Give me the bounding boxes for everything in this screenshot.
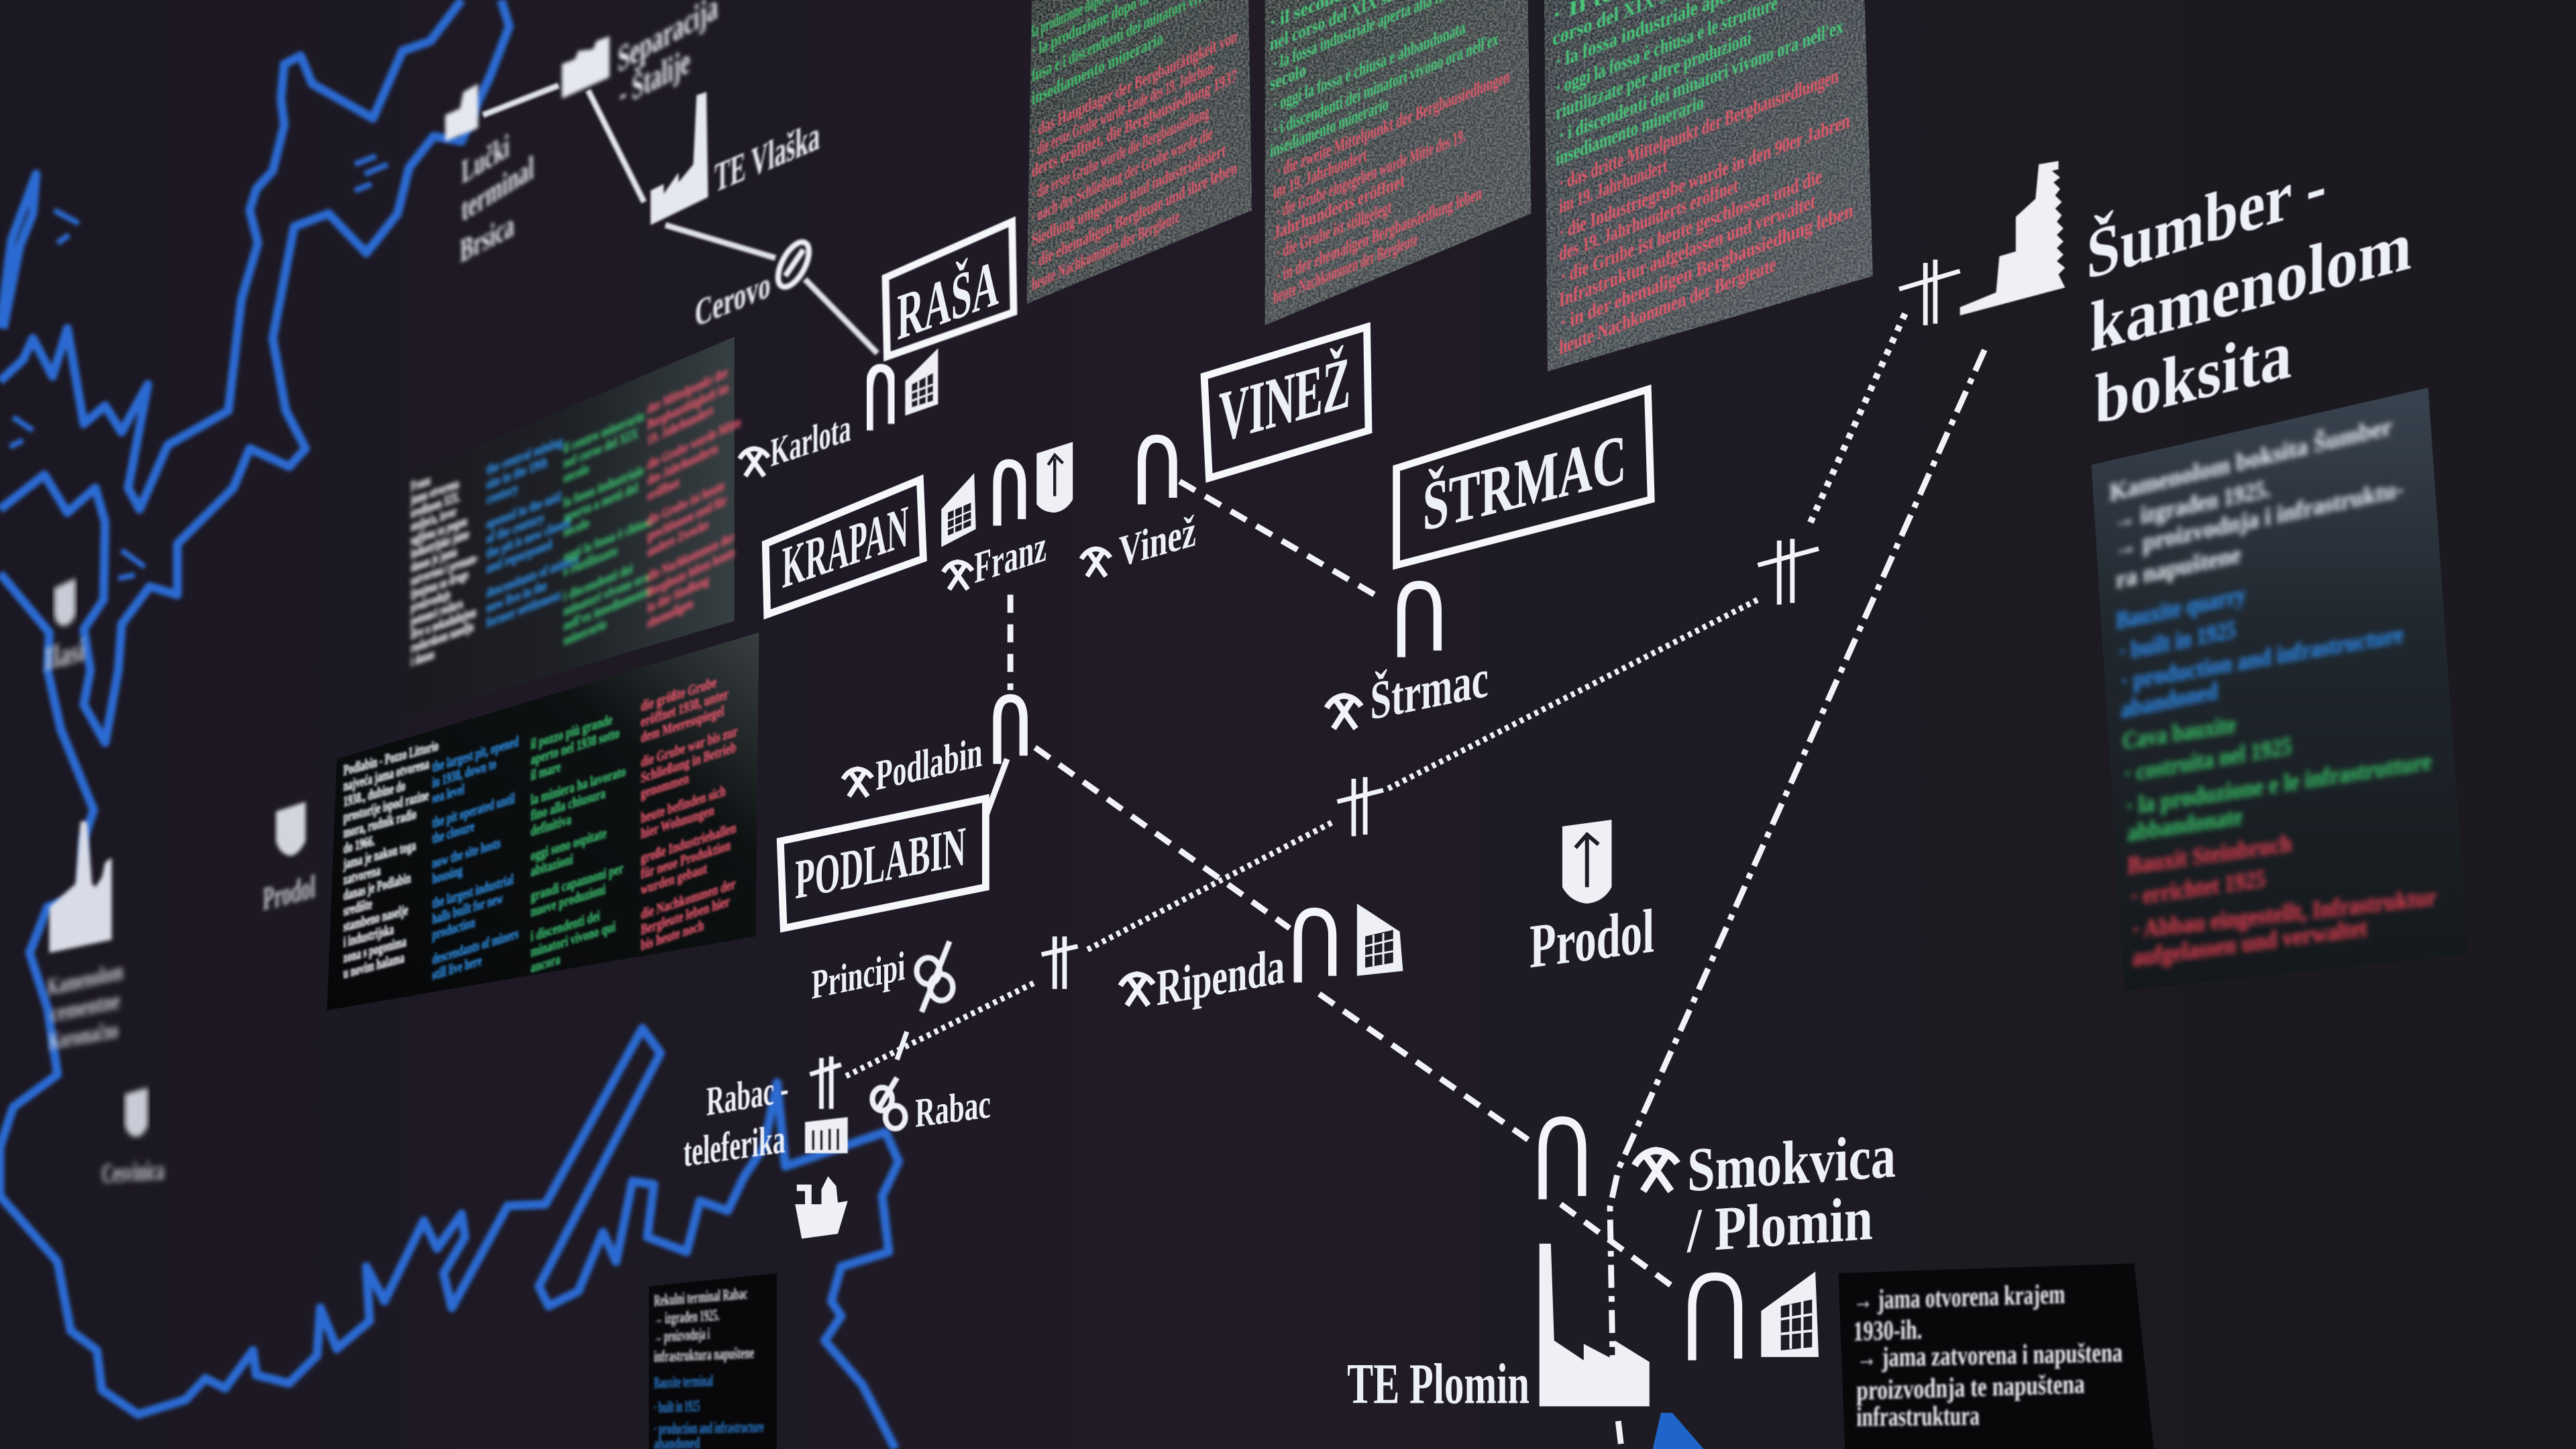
panel: top panel 2: insediamento minerario [1270, 93, 1388, 162]
icon: port Bršica [445, 84, 478, 142]
panel: Šumber quarry text: ra napuštene [2116, 541, 2241, 594]
panel: Šumber quarry text: Bauxite quarry [2116, 581, 2246, 635]
icon: hammers Vinež [1081, 549, 1110, 576]
panel: top panel 1: insediamento minerario [1032, 28, 1163, 109]
column: Croatian text: stoljeća, izvor [411, 503, 457, 535]
label: Prodol: Prodol [1529, 897, 1654, 981]
label: Ripenda: Ripenda [1157, 937, 1285, 1017]
icon: arch Smokvica [1543, 1120, 1582, 1199]
panel: Plomin pit text: infrastruktura [1856, 1401, 1980, 1433]
label: Prodol left, out of focus: Prodol [263, 868, 315, 918]
label: PODLABIN: PODLABIN [795, 815, 966, 911]
column: Croatian text: ijenjena za druge [411, 566, 469, 602]
label: Ilasi, out of focus: Ilasi [44, 631, 85, 678]
column: German text: in der Siedlung [647, 572, 709, 616]
column: Croatian text: jama otvorena [411, 475, 459, 508]
icon: Rabac terminal building [805, 1117, 848, 1153]
panel: top panel 2: Jahrhunderts eröffnet [1273, 170, 1405, 244]
column: Croatian text: zona s pogonima [343, 933, 407, 966]
icon: knot Principi [917, 941, 953, 1012]
column: English text: site in the 19th [486, 454, 547, 492]
column: English text: in 1938, down to [432, 755, 496, 792]
panel: Rabac terminal text: infrastruktura napuštene [654, 1344, 754, 1366]
icon: pylon near Šumber [1899, 260, 1960, 325]
column: German text: eröffnet [647, 474, 680, 504]
column: English text: the pit is now closed [486, 514, 570, 561]
column: Croatian text: industrijske jame [411, 525, 470, 562]
panel: Plomin pit text: proizvodnja te napuštena [1856, 1368, 2085, 1407]
column: Croatian text: danas je jama [411, 543, 458, 576]
label: Šumber - kamenolom boksita [2086, 145, 2412, 439]
column: German text: andere Zwecke [647, 516, 708, 560]
icon: arch Karlota [869, 368, 892, 431]
column: Italian text: e riutilizzata [564, 542, 618, 580]
column: German text: dem Meeresspiegel [641, 703, 724, 747]
icon: knot Cerovo [771, 237, 815, 292]
label: TE Vlaška: TE Vlaška [714, 111, 820, 201]
panel: top panel 1: · die ehemaligen Bergleute und ihre leben [1032, 158, 1237, 274]
column: English text: the largest pit, opened [432, 733, 519, 776]
label: Separacija - Štalije: - Štalije [619, 40, 690, 115]
column: Italian text: la miniera ha lavorato [531, 763, 626, 809]
panel: Šumber quarry text: · Abbau eingestellt, Infrastruktur [2133, 883, 2436, 943]
panel: lower-left multilingual table [327, 633, 759, 1010]
panel: Šumber quarry text: → izgrađen 1925. [2114, 475, 2270, 535]
column: German text: Bergleute leben hier [641, 894, 730, 938]
panel: Rabac terminal text [649, 1273, 777, 1449]
column: English text: descendants of miners [432, 925, 519, 968]
column: German text: eröffnet 1938, unter [641, 686, 729, 731]
column: Italian text: i discendenti dei [564, 560, 633, 605]
panel: top panel 2: im 19. Jahrhundert [1273, 144, 1367, 203]
icon: pylon centre [1337, 777, 1383, 837]
column: Croatian text: žive u nekadašnjem [411, 604, 476, 643]
icon: arch Štrmac [1401, 585, 1438, 657]
column: German text: Bergbautätigkeit im [647, 379, 729, 433]
label: VINEŽ: VINEŽ [1219, 341, 1350, 458]
route: dashed mine tunnels [985, 482, 1672, 1287]
label: Šumber - kamenolom boksita: Šumber - [2086, 145, 2326, 295]
column: German text: die Grube ist heute [647, 477, 724, 529]
column: German text: Bergleute leben heute [647, 544, 735, 600]
column: Italian text: i discendenti dei [531, 908, 600, 945]
column: German text: die Grube wurde Mitte [647, 414, 741, 473]
column: Croatian text: i danas [411, 645, 435, 669]
column: Italian text: oggi la fossa è chiusa [564, 513, 653, 566]
label: Podlabin: Podlabin [875, 728, 982, 800]
panel: top panel 3: · in der ehemaligen Bergbausiedlung leben [1561, 198, 1854, 335]
column: German text: geschlossen und für [647, 492, 727, 544]
column: English text: housing [432, 861, 463, 888]
column: English text: the central mining [486, 433, 564, 478]
column: Croatian text: do 1966. [343, 832, 375, 857]
column: Italian text: abitazioni [531, 851, 574, 880]
column: Italian text: ancora [531, 951, 560, 977]
icon: factory Separacija [562, 36, 610, 99]
icon: knot Rabac [872, 1078, 905, 1128]
label: Kamenolom cementne Koromačno, out of focus: Kamenolom [48, 958, 123, 1002]
panel: top panel 2: · die Grube ist stillgelegt [1277, 197, 1391, 264]
label: Kamenolom cementne Koromačno, out of focus: Koromačno [49, 1016, 118, 1056]
icon: hammers Franz [943, 562, 972, 590]
column: Croatian text: proizvodnje [411, 586, 451, 616]
label: Lučki terminal Brsica: terminal [462, 148, 534, 229]
panel: Plomin pit text: 1930-ih. [1853, 1314, 1922, 1347]
column: Croatian text: mora, rudnik radio [343, 806, 417, 841]
column: Croatian text: 1938., dubine do [343, 777, 405, 810]
column: Italian text: secolo [564, 515, 589, 541]
column: German text: große Industriehallen [641, 820, 737, 867]
label: Kamenolom cementne Koromačno, out of focus: cementne [51, 987, 120, 1028]
column: Croatian text: potomci rudara [411, 595, 464, 629]
panel: Šumber quarry text: aufgelassen und verwaltet [2133, 914, 2368, 971]
column: Croatian text: u novim halama [343, 949, 405, 981]
label: Rabac - teleferika: Rabac - [706, 1065, 789, 1125]
label: Rabac - teleferika: teleferika [684, 1116, 786, 1176]
column: Croatian text: danas je Podlabin [343, 869, 411, 904]
panel: top panel 3: · die Grube ist heute geschlossen und die [1561, 164, 1822, 288]
panel: Rabac terminal text: Rekulni terminal Rabac [654, 1285, 747, 1310]
icon: factory TE Vlaška [651, 92, 708, 225]
column: English text: production [432, 914, 476, 944]
icon: pylon Principi [1042, 936, 1078, 989]
label box: KRAPAN [765, 480, 923, 614]
column: English text: the closure [432, 818, 474, 847]
icon: shield Franz [1036, 442, 1073, 513]
column: English text: halls built for new [432, 890, 503, 928]
panel: top panel 1 [1027, 0, 1252, 304]
label: Cesvinica, out of focus: Cesvinica [102, 1155, 164, 1189]
route: dash-dot railway Šumber to Plomin [1610, 350, 1984, 1449]
label: Smokvica / Plomin [1686, 1122, 1896, 1266]
column: German text: des Jahrhunderts [647, 440, 718, 488]
label: Smokvica / Plomin: / Plomin [1686, 1184, 1873, 1266]
label box: PODLABIN [780, 798, 985, 928]
panel: top panel 2 [1265, 0, 1531, 325]
column: German text: genommen [641, 770, 689, 802]
icon: blue marker at bottom [1653, 1413, 1704, 1449]
column: Croatian text: Franz [411, 472, 431, 494]
panel: top panel 1: heute Nachkommen der Bergleute [1032, 206, 1179, 295]
panel: top panel 2: heute Nachkommen der Bergleute [1273, 229, 1417, 309]
label: Šumber - kamenolom boksita: kamenolom [2090, 206, 2412, 368]
label: Štrmac: Štrmac [1370, 647, 1489, 731]
column: German text: 19. Jahrhundert [647, 402, 714, 448]
label: Šumber - kamenolom boksita: boksita [2094, 315, 2292, 439]
panel: Plomin pit text: → jama otvorena krajem [1853, 1279, 2065, 1316]
icon: shield Prodol left, out of focus [276, 802, 306, 856]
column: Italian text: minatori vivono ora [564, 568, 649, 620]
column: German text: ehemaligen [647, 594, 693, 631]
icon: arch Franz [998, 464, 1022, 526]
icon: house Ripenda [1357, 904, 1403, 976]
column: Italian text: aperto nel 1938 sotto [531, 725, 620, 769]
panel: top panel 3: heute Nachkommen der Bergleute [1559, 252, 1776, 360]
label: Lučki terminal Brsica [460, 126, 534, 270]
column: English text: former settlement [486, 586, 561, 631]
label: TE Plomin: TE Plomin [1347, 1352, 1529, 1415]
panel: top panel 3: im 19. Jahrhundert [1559, 153, 1668, 218]
panel: Šumber quarry text: abandoned [2121, 678, 2218, 724]
panel: top panel 1: derts eröffnet, die Bergbausiedlung 1937 [1032, 66, 1237, 182]
panel: Plomin pit text [1838, 1263, 2154, 1449]
label: Smokvica / Plomin: Smokvica [1687, 1122, 1896, 1205]
icon: arch Vinež [1142, 439, 1173, 504]
column: English text: and repurposed [486, 536, 553, 576]
column: Italian text: il pozzo più grande [531, 712, 612, 753]
icon: factory TE Plomin [1540, 1244, 1650, 1406]
column: German text: wurden gebaut [641, 861, 707, 898]
column: English text: descendants of miners [486, 550, 578, 601]
icon: arch Ripenda [1298, 912, 1332, 982]
panel: top panel 3: des 19. Jahrhunderts eröffnet [1559, 173, 1738, 266]
column: English text: opened in the mid [486, 488, 561, 532]
panel: Rabac terminal text: Bauxite terminal [654, 1372, 713, 1392]
label: Lučki terminal Brsica: Brsica [460, 207, 515, 270]
panel: Šumber quarry text: Bauxit Steinbruch [2127, 829, 2292, 879]
label: Vinež: Vinež [1119, 506, 1196, 577]
column: German text: hier Wohnungen [641, 802, 714, 843]
column: Croatian text: zatvorena i prenam- [411, 549, 478, 589]
icon: pylon east [1758, 539, 1819, 604]
column: English text: the pit operated until [432, 790, 515, 832]
column: English text: now the site hosts [432, 835, 500, 872]
label: Rabac: Rabac [915, 1081, 991, 1136]
column: English text: the largest industrial [432, 871, 513, 912]
column: English text: now live in the [486, 578, 547, 616]
column: Croatian text: sredinom XIX. [411, 488, 460, 521]
column: Italian text: nel corso del XIX [564, 425, 639, 472]
icon: arch Plomin [1692, 1277, 1738, 1360]
label: Franz: Franz [974, 521, 1046, 593]
link knot icons [771, 237, 953, 1128]
panel: Šumber quarry text: · production and infrastructure [2121, 621, 2404, 696]
panel: Rabac terminal text: → proizvodnja i [654, 1325, 710, 1346]
label box: VINEŽ [1204, 327, 1368, 478]
icon: pylon Rabac [810, 1057, 841, 1109]
mine hammer icons [740, 449, 1677, 1191]
panel: top panel 3 [1544, 0, 1873, 371]
label: Rabac - teleferika [684, 1065, 789, 1176]
column: Croatian text: stambeno naselje [343, 902, 408, 934]
column: German text: bis heute noch [641, 917, 704, 954]
icon: arch Podlabin [998, 698, 1024, 764]
column: Croatian text: Podlabin - Pozzo Littorio [343, 737, 439, 779]
column: Italian text: nuove produzioni [531, 881, 606, 920]
panel: top panel 3: Infrastruktur aufgelassen und verwaltet [1559, 189, 1815, 312]
icon: hammers Ripenda [1120, 974, 1153, 1006]
panel: Šumber quarry text: · built in 1925 [2119, 616, 2236, 666]
panel: Šumber quarry text: → proizvodnja i infrastruktu- [2114, 475, 2404, 563]
column: Italian text: fino alla chiusura [531, 785, 606, 824]
icon: quarry staircase Šumber [1960, 161, 2065, 315]
label: Principi: Principi [812, 943, 905, 1008]
panel: Šumber quarry text: Kamenolom boksita Šumber [2109, 411, 2392, 507]
column: Croatian text: najveća jama otvorena [343, 755, 429, 794]
panel: top panel 3: · die Industriegrube wurde in den 90er Jahren [1559, 108, 1850, 244]
panel: Šumber quarry text: · errichtet 1925 [2131, 864, 2265, 910]
column: Croatian text: rudarskom naselju [411, 618, 474, 656]
icon: cement factory Koromačno [49, 821, 112, 953]
column: Italian text: il mare [531, 759, 561, 784]
label: ŠTRMAC: ŠTRMAC [1423, 419, 1626, 546]
column: Croatian text: jama je nakon toga [343, 837, 416, 873]
boxed region names [765, 222, 1651, 928]
column: Croatian text: zatvorena [343, 862, 380, 888]
route: solid railway lines Raša to Brsica [483, 85, 877, 354]
panel: Šumber quarry text [2092, 388, 2467, 991]
column: Italian text: grandi capannoni per [531, 860, 624, 905]
column: German text: die Nachkommen der [647, 529, 735, 584]
label: Karlota: Karlota [771, 405, 851, 476]
panel: top panel 3: insediamento minerario [1556, 90, 1704, 170]
panel: top panel 2: · in der ehemaligen Bergbausiedlung leben [1277, 182, 1482, 287]
column: Italian text: aperta a metà del [564, 480, 638, 526]
icon: house Plomin [1761, 1272, 1819, 1357]
column: English text: of the century [486, 509, 545, 547]
label: RAŠA: RAŠA [897, 245, 999, 354]
column: English text: sea level [432, 781, 464, 807]
label: Kamenolom cementne Koromačno, out of focus [48, 958, 123, 1056]
column: Italian text: oggi sono ospitate [531, 825, 606, 865]
panel: top panel 2: secolo [1270, 60, 1306, 95]
column: German text: heute befinden sich [641, 783, 726, 827]
panel: Rabac terminal text: · built in 1925 [654, 1397, 700, 1417]
icon: ship [795, 1176, 848, 1239]
column: German text: die Grube war bis zur [641, 723, 738, 771]
icon: hammers Podlabin [843, 769, 872, 796]
column: German text: die Nachkommen der [641, 875, 736, 923]
column: English text: still live here [432, 952, 482, 984]
icon: shield Ilasi, out of focus [54, 578, 76, 626]
column: Italian text: la fossa industriale [564, 462, 644, 511]
icon: hammers Smokvica [1635, 1150, 1677, 1191]
column: Italian text: minatori vivono qui [531, 918, 616, 961]
column: Italian text: nell'ex insediamento [564, 582, 651, 635]
column: Croatian text: prostorije ispod razine [343, 787, 429, 826]
panel: top panel 1: Siedlung umgebaut und industrialisiert [1032, 140, 1226, 251]
panel: Rabac terminal text: · production and infrastructure [654, 1418, 764, 1438]
column: Italian text: minerario [564, 616, 606, 649]
panel: top panel 1: · nach der Schließung der Grube wurde die [1032, 123, 1212, 228]
column: Italian text: secolo [564, 460, 589, 487]
icon: hammers Karlota [740, 449, 769, 476]
panel: mid-left multilingual table [406, 337, 741, 718]
icon: shield Cesvinica, out of focus [125, 1087, 148, 1137]
panel: top panel 2: · die Grube eingegeben wurde Mitte des 19. [1277, 125, 1465, 223]
label: Lučki terminal Brsica: Lučki [462, 126, 509, 191]
icon: hammers Štrmac [1327, 696, 1361, 729]
column: Croatian text: i industrijska [343, 921, 394, 951]
label box: RAŠA [885, 222, 1014, 356]
column: Italian text: il centro minerario [564, 408, 644, 457]
panel: top panel 2: · die zweite Mittelpunkt der Bergbausiedlungen [1277, 66, 1510, 182]
icon: house Karlota [905, 348, 938, 416]
panel: Šumber quarry text: Cava bauxite [2123, 710, 2236, 755]
column: Croatian text: ugljena za pogon [411, 513, 468, 548]
label: KRAPAN: KRAPAN [782, 492, 908, 601]
column: Italian text: definitiva [531, 811, 572, 840]
column: German text: Schließung in Betrieb [641, 739, 736, 787]
label: Cerovo: Cerovo [695, 262, 771, 335]
panel: Rabac terminal text: → izgrađen 1925. [654, 1306, 720, 1328]
mine arches [869, 368, 1738, 1360]
icon: shield Prodol [1562, 820, 1611, 904]
column: Croatian text: središte [343, 896, 372, 919]
panel: Plomin pit text: → jama zatvorena i napuštena [1856, 1338, 2123, 1374]
label box: ŠTRMAC [1397, 389, 1651, 565]
panel: top panel 3: · das dritte Mittelpunkt der Bergbausiedlungen [1559, 64, 1839, 195]
route: dotted cableway [846, 312, 1906, 1076]
panel: Šumber quarry text: · costruita nel 1925 [2125, 732, 2292, 788]
panel: top panel 1: · die erste Grube wurde die Bergbausiedlung [1032, 102, 1209, 205]
panel: Šumber quarry text: abbandonate [2127, 802, 2243, 847]
column: German text: die größte Grube [641, 674, 716, 715]
panel: Šumber quarry text: · la produzione e le infrastrutture [2126, 747, 2431, 820]
column: English text: century [486, 480, 519, 507]
map: blue coastline [0, 0, 899, 1449]
icon: house Franz [941, 473, 976, 547]
cable pylons [810, 260, 1960, 1109]
column: German text: für neue Produktion [641, 837, 731, 883]
column: German text: der Mittelpunkt der [647, 364, 729, 417]
route: Principi mark on cableway [897, 1032, 907, 1060]
